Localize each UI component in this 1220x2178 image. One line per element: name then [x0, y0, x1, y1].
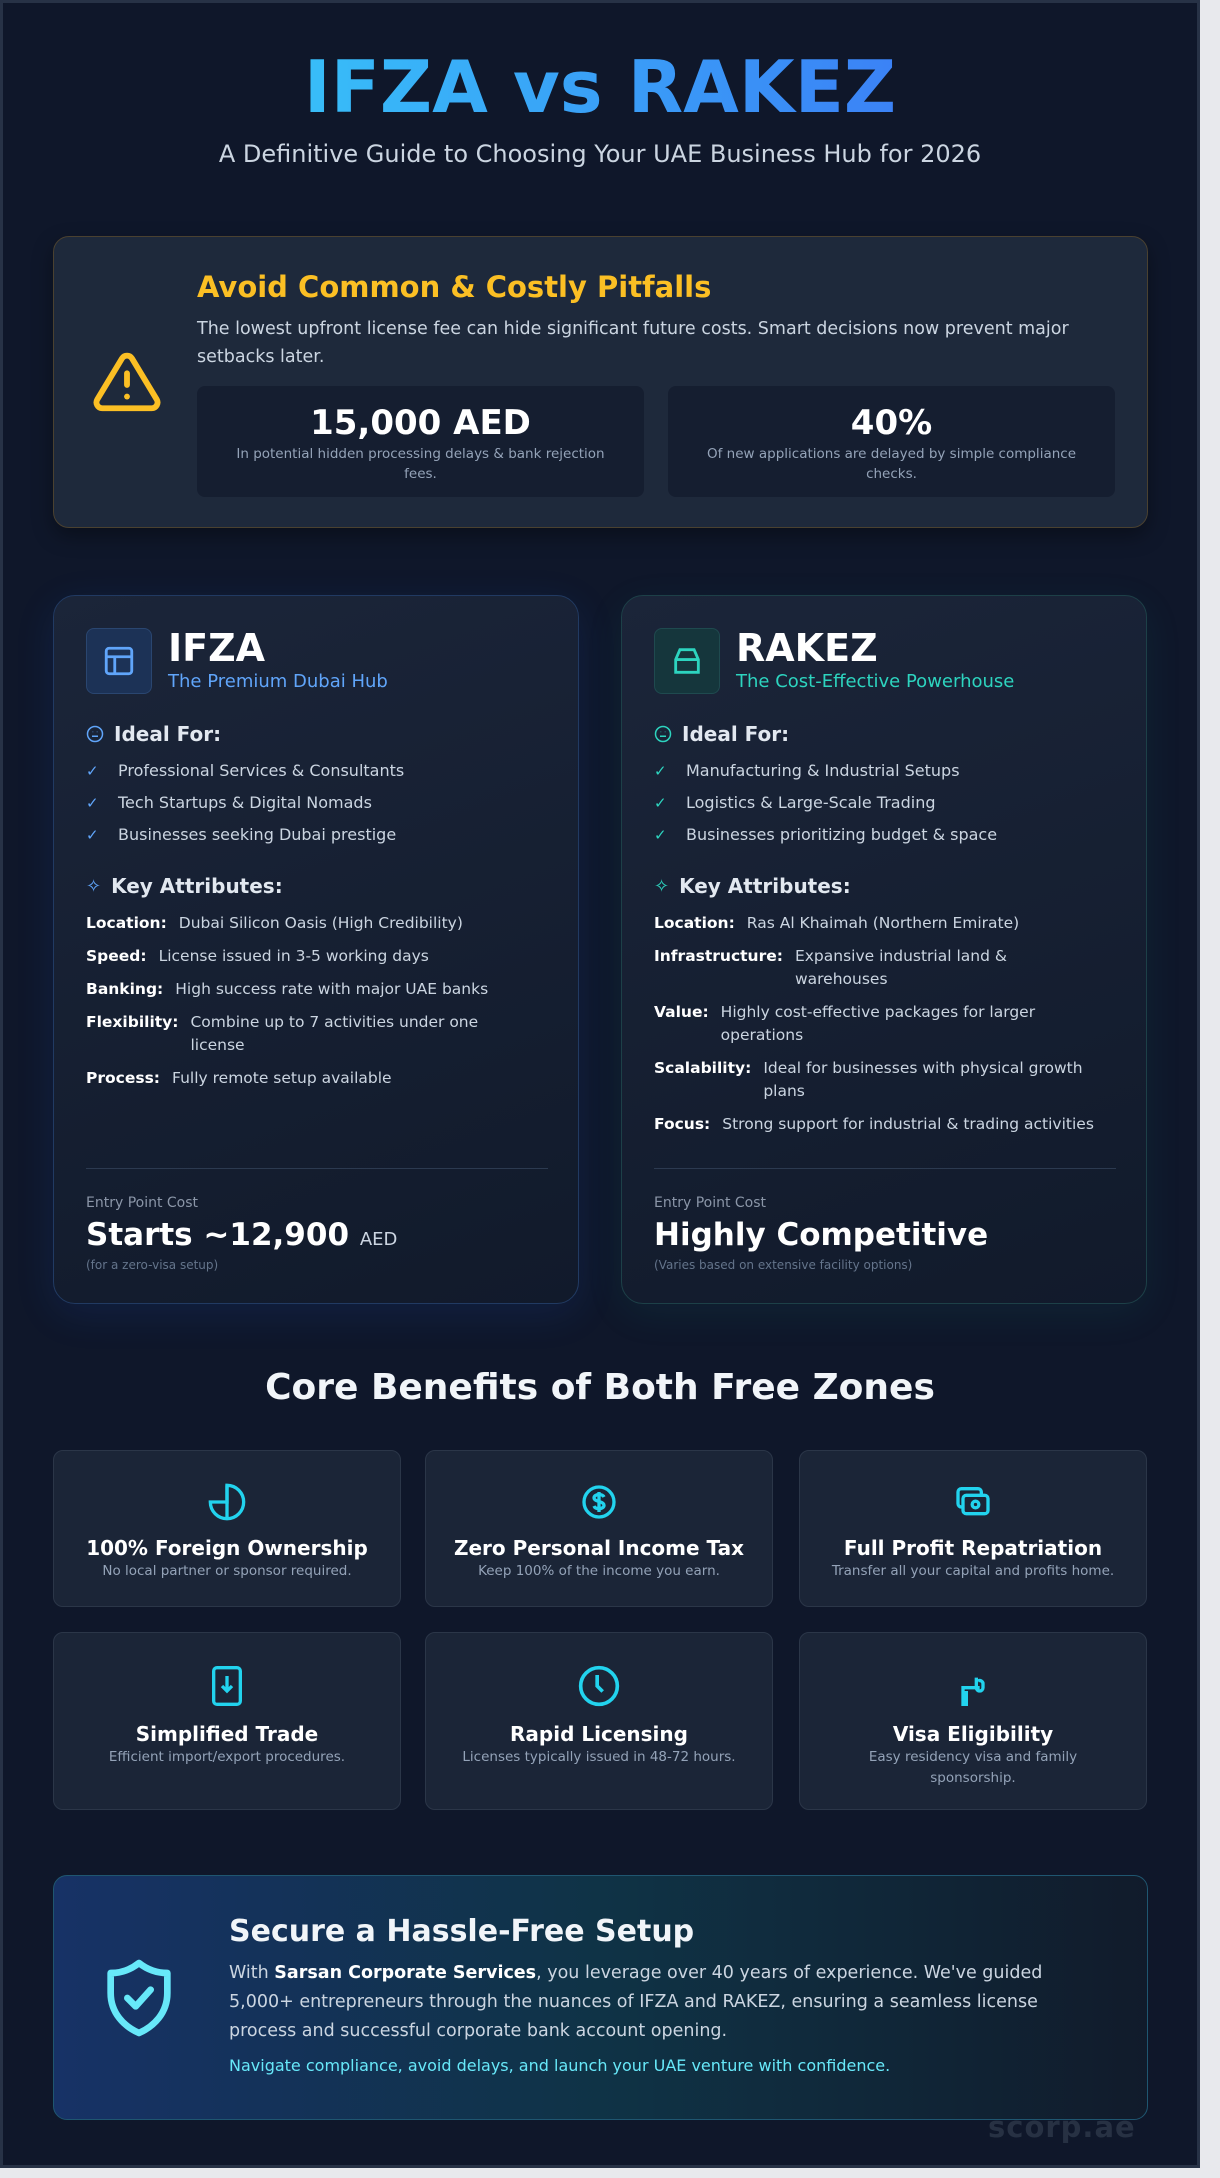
attributes list: Strong support for industrial & trading activities: [722, 1115, 1094, 1133]
benefit: trade: Efficient import/export procedures.: [109, 1749, 345, 1765]
list: ideal for: Logistics & Large-Scale Trading: [686, 793, 935, 812]
benefit: tax: Zero Personal Income Tax: [454, 1536, 744, 1560]
attributes list: Combine up to 7 activities under one license: [190, 1013, 478, 1054]
benefit: repatriation: [799, 1450, 1147, 1607]
subtitle: A Definitive Guide to Choosing Your UAE Business Hub for 2026: [219, 140, 981, 168]
cost label: Entry Point Cost: [86, 1195, 198, 1211]
price note: (for a zero-visa setup): [86, 1258, 218, 1272]
list: ideal for: Businesses prioritizing budget & space: [686, 825, 997, 844]
heading: pitfalls: Avoid Common & Costly Pitfalls: [197, 270, 711, 304]
stat: hidden fees: [197, 386, 644, 497]
attributes list: Location:: [654, 914, 735, 932]
list: ideal for: ✓: [654, 826, 667, 844]
icon: RAKEZ store: [654, 628, 720, 694]
heading: ideal for: Ideal For:: [114, 722, 221, 746]
list: ideal for: ✓: [86, 794, 99, 812]
panel: IFZA: [53, 595, 579, 1304]
list: ideal for: Businesses seeking Dubai prestige: [118, 825, 396, 844]
benefit: visa: Visa Eligibility: [893, 1722, 1053, 1746]
list: ideal for: Professional Services & Consultants: [118, 761, 404, 780]
attributes list: Process:: [86, 1069, 160, 1087]
heading: ideal for: Ideal For:: [682, 722, 789, 746]
stat: delayed applications: 40%: [851, 403, 932, 443]
cost label: Entry Point Cost: [654, 1195, 766, 1211]
icon: IFZA layout: [86, 628, 152, 694]
list: ideal for: ✓: [86, 826, 99, 844]
benefit: tax: [425, 1450, 773, 1607]
tagline: The Premium Dubai Hub: [168, 671, 388, 692]
icon: shield: [107, 1960, 171, 2036]
attributes list: Focus:: [654, 1115, 710, 1133]
price note: (Varies based on extensive facility options): [654, 1258, 912, 1272]
benefit: licensing: [425, 1632, 773, 1810]
heading: RAKEZ: RAKEZ: [736, 626, 878, 670]
attributes list: Ideal for businesses with physical growth plans: [763, 1059, 1083, 1100]
list: ideal for: ✓: [654, 762, 667, 780]
stat: delayed applications: [668, 386, 1115, 497]
heading: core benefits: Core Benefits of Both Free Zones: [265, 1367, 935, 1408]
heading: key attributes: Key Attributes:: [111, 874, 283, 898]
attributes list: [86, 914, 488, 1087]
heading: key attributes: Key Attributes:: [679, 874, 851, 898]
heading: key attributes: ✧: [86, 876, 101, 896]
attributes list: License issued in 3-5 working days: [159, 947, 429, 965]
benefit: repatriation: Full Profit Repatriation: [844, 1536, 1102, 1560]
benefit: ownership: [53, 1450, 401, 1607]
benefit: repatriation: Transfer all your capital and profits home.: [832, 1563, 1114, 1579]
list: ideal for: [86, 761, 404, 844]
benefit: ownership: 100% Foreign Ownership: [86, 1536, 368, 1560]
text: CTA tagline: Navigate compliance, avoid delays, and launch your UAE venture with confidence.: [229, 2056, 890, 2075]
benefit: licensing: Rapid Licensing: [510, 1722, 688, 1746]
benefit: licensing: Licenses typically issued in 48-72 hours.: [462, 1749, 736, 1765]
benefit: visa: [799, 1632, 1147, 1810]
attributes list: Fully remote setup available: [172, 1069, 392, 1087]
watermark: scorp.ae: [988, 2110, 1136, 2144]
tagline: The Cost-Effective Powerhouse: [736, 671, 1014, 692]
attributes list: Location:: [86, 914, 167, 932]
attributes list: [654, 914, 1094, 1133]
attributes list: Flexibility:: [86, 1013, 178, 1031]
title: IFZA vs RAKEZ: [304, 45, 896, 129]
list: ideal for: ✓: [654, 794, 667, 812]
attributes list: Expansive industrial land & warehouses: [795, 947, 1007, 988]
price: Highly Competitive: [654, 1217, 988, 1253]
panel: call to action: [53, 1875, 1148, 2120]
benefit: visa: Easy residency visa and family sponsorship.: [869, 1749, 1077, 1786]
stat: hidden fees: 15,000 AED: [310, 403, 531, 443]
list: ideal for: Tech Startups & Digital Nomads: [118, 793, 372, 812]
heading: key attributes: ✧: [654, 876, 669, 896]
list: ideal for: Manufacturing & Industrial Setups: [686, 761, 960, 780]
attributes list: Ras Al Khaimah (Northern Emirate): [747, 914, 1019, 932]
benefit: ownership: No local partner or sponsor required.: [102, 1563, 352, 1579]
heading: CTA: Secure a Hassle-Free Setup: [229, 1914, 694, 1949]
price: Starts ~12,900 AED: [86, 1217, 397, 1253]
icon: warning: [94, 352, 160, 412]
attributes list: Highly cost-effective packages for larger operations: [721, 1003, 1035, 1044]
stat: delayed applications: Of new applications are delayed by simple compliance checks.: [707, 446, 1076, 482]
attributes list: Banking:: [86, 980, 163, 998]
panel: RAKEZ: [621, 595, 1147, 1304]
text: pitfalls intro: The lowest upfront license fee can hide significant future costs. Smart decisions now prevent major setbacks later.: [197, 319, 1069, 367]
attributes list: Value:: [654, 1003, 709, 1021]
benefit: trade: [53, 1632, 401, 1810]
list: ideal for: ✓: [86, 762, 99, 780]
heading: IFZA: IFZA: [168, 626, 265, 670]
attributes list: High success rate with major UAE banks: [175, 980, 488, 998]
benefit: tax: Keep 100% of the income you earn.: [478, 1563, 720, 1579]
benefit: trade: Simplified Trade: [136, 1722, 318, 1746]
text: CTA body: With Sarsan Corporate Services, you leverage over 40 years of experience. We've guided 5,000+ entrepreneurs through the nuances of IFZA and RAKEZ, ensuring a seamless license process and successful corporate bank account opening.: [229, 1963, 1042, 2041]
attributes list: Dubai Silicon Oasis (High Credibility): [179, 914, 463, 932]
attributes list: Infrastructure:: [654, 947, 783, 965]
attributes list: Speed:: [86, 947, 147, 965]
list: ideal for: [654, 761, 997, 844]
panel: pitfalls: [53, 236, 1148, 528]
attributes list: Scalability:: [654, 1059, 751, 1077]
stat: hidden fees: In potential hidden processing delays & bank rejection fees.: [236, 446, 605, 482]
